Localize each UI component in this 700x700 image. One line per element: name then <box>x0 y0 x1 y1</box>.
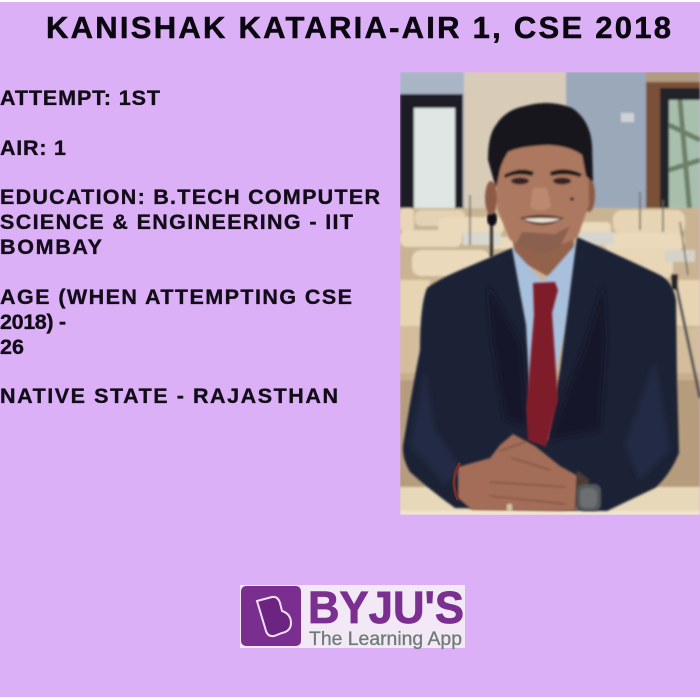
education <box>0 185 380 259</box>
bracelet <box>454 463 460 500</box>
logo: BYJU'S The Learning App <box>240 582 465 650</box>
tagline: The Learning App <box>309 629 462 650</box>
lapel shading <box>488 285 606 440</box>
attempt: ATTEMPT: 1ST <box>0 86 160 110</box>
brand name: BYJU'S <box>308 582 464 633</box>
text block: candidate details <box>0 86 380 408</box>
hands <box>458 434 578 511</box>
native state: NATIVE STATE - RAJASTHAN <box>0 384 338 408</box>
rank: AIR: 1 <box>0 136 66 160</box>
neck and shirt <box>510 238 577 386</box>
age: AGE (WHEN ATTEMPTING CSE <box>0 285 352 309</box>
age: 2018) - <box>0 310 66 334</box>
education: EDUCATION: B.TECH COMPUTER <box>0 185 380 209</box>
microphone <box>487 212 497 257</box>
room background <box>400 72 700 515</box>
icon: B mark <box>241 586 301 646</box>
head <box>485 103 595 254</box>
tie <box>526 282 558 447</box>
photo: portrait of Kanishak Kataria <box>400 72 700 515</box>
suit jacket <box>403 237 679 511</box>
education: BOMBAY <box>0 235 102 259</box>
person <box>403 103 679 511</box>
age <box>0 285 352 359</box>
watch <box>575 470 601 511</box>
logo background <box>240 585 465 648</box>
sleeve highlights <box>410 360 670 485</box>
age: 26 <box>0 335 24 359</box>
title: KANISHAK KATARIA-AIR 1, CSE 2018 <box>46 10 671 45</box>
education: SCIENCE & ENGINEERING - IIT <box>0 210 353 234</box>
desk rows <box>400 208 414 232</box>
